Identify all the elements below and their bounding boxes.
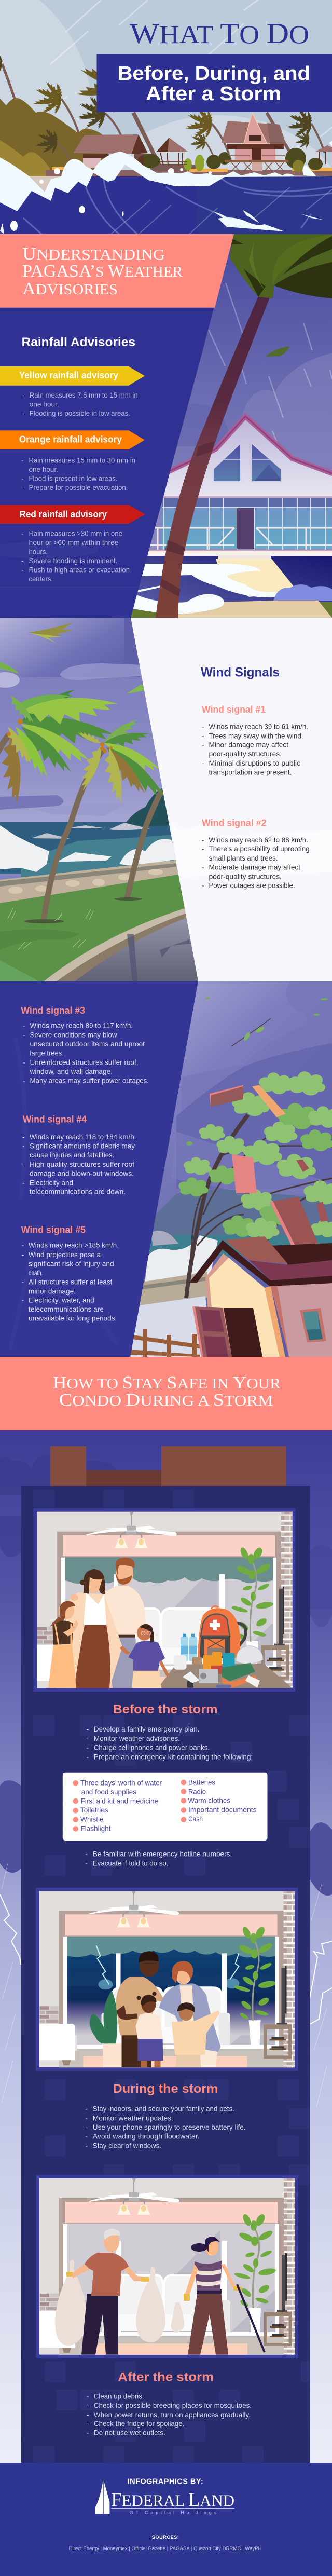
wind signal 5: - — [22, 1278, 24, 1286]
wind signal 3: Unreinforced structures suffer roof, — [30, 1059, 138, 1066]
during the storm checklist: - — [85, 2115, 88, 2122]
wind signal 3 — [21, 1005, 149, 1084]
hero illustration: storm over beach resort — [0, 0, 332, 342]
red advisory arrow: Red rainfall advisory — [20, 509, 107, 520]
wind signal 4: Significant amounts of debris may — [30, 1142, 135, 1150]
wind signal 3: Winds may reach 89 to 117 km/h. — [30, 1021, 133, 1029]
during the storm checklist: Stay clear of windows. — [93, 2142, 161, 2150]
man in cream shirt — [99, 1558, 148, 1688]
wind signal 4: Electricity and — [30, 1179, 73, 1187]
wind signal 5: - — [22, 1251, 24, 1259]
toilet paper — [174, 1655, 187, 1670]
palm trunk — [156, 287, 274, 618]
storm clouds at the top — [0, 1455, 125, 1495]
road — [67, 909, 198, 981]
red advisory text: Rush to high areas or evacuation — [29, 566, 130, 574]
section heading band: How to Stay Safe in Your Condo During a Storm: HOW TO STAY SAFE IN YOUR — [53, 1373, 281, 1393]
emergency backpack — [198, 1606, 246, 1658]
red advisory arrow — [0, 505, 145, 524]
sources — [69, 2534, 262, 2552]
shadow palm on road — [127, 934, 137, 981]
fence — [130, 1329, 200, 1357]
wind signal 4: High-quality structures suffer roof — [30, 1161, 134, 1168]
before the storm checklist: Prepare an emergency kit containing the following: — [94, 1753, 253, 1761]
wind signal 3: - — [23, 1031, 25, 1039]
emergency kit list box: Toiletries — [80, 1806, 108, 1814]
girl in purple shirt — [120, 1624, 170, 1688]
palm trees behind the resort — [0, 52, 325, 166]
emergency kit list box: Flashlight — [81, 1824, 111, 1832]
hills — [0, 98, 114, 176]
wind signal 2: - — [202, 845, 204, 853]
flying branch — [231, 1018, 271, 1046]
girl in polka dot blouse — [136, 1992, 163, 2067]
before the storm checklist: Monitor weather advisories. — [94, 1735, 180, 1742]
wind signal 3: large trees. — [30, 1050, 64, 1057]
glass ground floor — [150, 496, 332, 550]
yellow advisory arrow — [0, 366, 145, 386]
orange advisory arrow: Orange rainfall advisory — [19, 434, 122, 445]
woman in striped shirt — [184, 2237, 242, 2355]
storm tree — [186, 1115, 332, 1298]
hard hat — [236, 1646, 263, 1664]
woman in white blouse and brown skirt — [65, 1569, 122, 1688]
section heading panel: Understanding PAGASA's Weather Advisories: ADVISORIES — [22, 279, 118, 298]
wind signal 1 — [202, 704, 308, 776]
title banner: Before, During, and After a Storm: After a Storm — [146, 83, 281, 105]
before the storm checklist: Charge cell phones and power banks. — [94, 1744, 210, 1752]
wind signal 2: Moderate damage may affect — [209, 863, 300, 871]
father in tan shirt — [116, 1951, 165, 2067]
wind signal 3: window, and wall damage. — [29, 1068, 113, 1075]
older man in brown shirt — [66, 2229, 149, 2355]
flying roof planks — [210, 1085, 328, 1253]
wind signal 2: - — [202, 882, 204, 890]
red advisory text: - — [21, 530, 24, 538]
before the storm extra tips — [85, 1850, 232, 1867]
wind signal 3: Severe conditions may blow — [30, 1031, 117, 1039]
before the storm checklist: - — [86, 1735, 89, 1742]
wind signal 3: unsecured outdoor items and uproot — [30, 1040, 145, 1048]
wind signal 3: - — [23, 1076, 25, 1084]
grass — [0, 874, 195, 981]
sea — [0, 176, 332, 234]
after the storm checklist: Clean up debris. — [94, 2392, 144, 2400]
during the storm checklist: - — [85, 2123, 88, 2131]
before the storm extra tips: - — [85, 1859, 88, 1867]
yellow advisory text: - — [22, 410, 25, 417]
wind signal 2: - — [202, 836, 204, 844]
yellow advisory text: - — [22, 391, 25, 399]
sky background behind building — [0, 1430, 332, 2463]
section heading panel: Understanding PAGASA's Weather Advisories: PAGASA’S WEATHER — [22, 262, 183, 281]
during the storm checklist: - — [85, 2133, 88, 2141]
beach behind wave — [30, 176, 61, 193]
orange advisory text: one hour. — [29, 466, 58, 473]
orange advisory text — [21, 457, 135, 492]
wind signal 2: - — [202, 863, 204, 871]
potted striped plant — [90, 1991, 121, 2067]
during the storm checklist: Use your phone sparingly to preserve battery life. — [93, 2123, 246, 2131]
section heading band: How to Stay Safe in Your Condo During a Storm — [0, 1357, 332, 1430]
garbage bags — [55, 2260, 184, 2346]
wind signal 1: Wind signal #1 — [202, 704, 266, 715]
during the storm checklist: - — [85, 2142, 88, 2150]
section heading panel: Understanding PAGASA's Weather Advisories — [0, 234, 234, 308]
wind signal 4: - — [22, 1142, 25, 1150]
wind signal 1: Winds may reach 39 to 61 km/h. — [209, 723, 308, 731]
red advisory text: - — [21, 566, 24, 574]
wind signal 3: Many areas may suffer power outages. — [30, 1076, 149, 1084]
wind signal 4: Wind signal #4 — [23, 1114, 87, 1125]
before the storm checklist: Develop a family emergency plan. — [94, 1725, 199, 1733]
wind signal 5: significant risk of injury and — [29, 1260, 114, 1267]
logo: Federal Land: FEDERAL LAND — [111, 2489, 234, 2511]
logo: Federal Land: GT Capital Holdings — [130, 2510, 216, 2515]
title banner: Before, During, and After a Storm: Before, During, and — [117, 63, 310, 85]
emergency kit list box: Three days’ worth of water — [80, 1779, 162, 1787]
panel: wind signals 3 to 5 background — [0, 981, 198, 1357]
wind signal 4: - — [22, 1179, 25, 1187]
hut: gazebo — [156, 138, 188, 165]
boy in peach shirt — [171, 2002, 220, 2067]
wind signal 2: poor-quality structures. — [209, 873, 282, 880]
wind signal 4: telecommunications are down. — [30, 1188, 126, 1195]
before the storm checklist: - — [86, 1753, 89, 1761]
orange advisory text: - — [21, 457, 24, 465]
wind signal 1: Trees may sway with the wind. — [209, 732, 303, 740]
title banner: Before, During, and After a Storm — [96, 54, 332, 112]
after the storm checklist: - — [87, 2402, 89, 2409]
red advisory text: Severe flooding is imminent. — [29, 557, 117, 565]
wind signal 4: Winds may reach 118 to 184 km/h. — [30, 1133, 136, 1141]
before the storm extra tips: Evacuate if told to do so. — [93, 1859, 168, 1867]
wind signal 1: - — [202, 741, 204, 749]
wind signal 2: small plants and trees. — [209, 854, 278, 862]
side storm clouds — [0, 1780, 21, 1873]
wind signal 5: death. — [29, 1269, 43, 1277]
wind signal 2: There’s a possibility of uprooting — [209, 845, 310, 853]
tree foliage — [178, 1071, 332, 1239]
illustration: flying debris and house — [125, 981, 332, 1357]
before the storm checklist: - — [86, 1725, 89, 1733]
red advisory text: Rain measures >30 mm in one — [29, 530, 122, 538]
during the storm checklist: Monitor weather updates. — [93, 2115, 173, 2122]
wind signal 1: - — [202, 723, 204, 731]
side lightning — [0, 1894, 332, 2024]
before the storm extra tips: - — [85, 1850, 88, 1858]
sea swirl lines — [23, 178, 332, 234]
after the storm checklist: When power returns, turn on appliances gradually. — [94, 2411, 251, 2419]
palm leaves — [230, 234, 332, 298]
canned goods — [192, 1652, 234, 1674]
house upper gable — [164, 417, 332, 496]
wind signal 5 — [21, 1224, 119, 1323]
illustration: palms on windy seawall — [0, 618, 208, 981]
during the storm checklist: - — [85, 2105, 88, 2113]
wind signal 5: - — [22, 1242, 24, 1249]
yellow advisory text — [22, 391, 138, 417]
illustration: house and palm in rain — [125, 234, 332, 618]
wind signal 1: poor-quality structures. — [209, 750, 282, 758]
heading: Wind Signals: Wind Signals — [201, 665, 280, 680]
stone seawall — [0, 860, 181, 903]
grass tufts — [8, 908, 93, 950]
emergency kit list box: Cash — [188, 1815, 203, 1823]
after the storm checklist — [87, 2392, 252, 2436]
wind signal 1: transportation are present. — [209, 768, 292, 776]
palm crowns — [0, 684, 119, 805]
hut: long roof house — [73, 134, 148, 168]
wind signal 5: telecommunications are — [29, 1305, 104, 1313]
wind signal 1: Minor damage may affect — [209, 741, 288, 749]
litter picker tool — [237, 2284, 265, 2352]
wind signal 5: Winds may reach >185 km/h. — [29, 1242, 119, 1249]
foam patches on sea — [0, 210, 324, 234]
wind signal 5: Wind projectiles pose a — [29, 1251, 101, 1259]
emergency kit list box: Whistle — [80, 1816, 104, 1823]
after the storm checklist: - — [87, 2429, 89, 2436]
window scene 3: cleaning up after storm — [36, 2175, 298, 2358]
palm trunks — [44, 750, 162, 921]
before the storm checklist — [86, 1725, 253, 1761]
sources: Direct Energy | Moneymax | Official Gazette | PAGASA | Quezon City DRRMC | WayPH — [69, 2546, 262, 2552]
after the storm checklist: - — [87, 2420, 89, 2428]
building facade — [21, 1486, 310, 2463]
window scene 1: family with emergency kit — [33, 1508, 295, 1692]
wind signal 1: Minimal disruptions to public — [209, 759, 300, 767]
emergency kit list box: and food supplies — [81, 1788, 136, 1796]
orange advisory text: Rain measures 15 mm to 30 mm in — [29, 457, 135, 465]
radio and books — [182, 1663, 260, 1688]
wind signal 1: - — [202, 759, 204, 767]
white wave foam — [0, 823, 179, 872]
main stilt house — [222, 113, 288, 171]
house in storm — [189, 1236, 332, 1357]
orange advisory text: Prepare for possible evacuation. — [29, 484, 128, 492]
yellow advisory text: one hour. — [30, 400, 59, 408]
after the storm checklist: - — [87, 2411, 89, 2419]
red advisory text — [21, 530, 130, 583]
flying leaf — [28, 622, 73, 644]
wind signal 4: - — [22, 1161, 25, 1168]
kit table — [158, 1664, 293, 1688]
wind signal 2 — [202, 817, 310, 890]
emergency kit list box: First aid kit and medicine — [81, 1797, 158, 1805]
after the storm checklist: Check for possible breeding places for mosquitoes. — [94, 2402, 252, 2409]
shore and sea wall — [46, 165, 332, 178]
wind signal 1: - — [202, 732, 204, 740]
sources: SOURCES: — [152, 2534, 179, 2540]
wind signal 5: Electricity, water, and — [29, 1297, 94, 1304]
deck and water — [125, 555, 332, 618]
credit label: INFOGRAPHICS BY: — [128, 2477, 203, 2486]
distant hill and sea — [153, 1189, 332, 1235]
wind signal 2: Power outages are possible. — [209, 882, 295, 890]
white wave — [145, 1235, 218, 1282]
wind signal 3: - — [23, 1021, 25, 1029]
section heading panel: Understanding PAGASA's Weather Advisories: UNDERSTANDING — [22, 244, 165, 264]
small right hut — [315, 145, 332, 164]
during the storm checklist: Stay indoors, and secure your family and pets. — [93, 2105, 234, 2113]
yellow advisory arrow: Yellow rainfall advisory — [19, 370, 118, 380]
clouds outside window — [61, 1557, 275, 1585]
heading: Rainfall Advisories: Rainfall Advisories — [22, 335, 135, 349]
emergency kit list box: Important documents — [188, 1806, 257, 1814]
mother in grey blazer — [159, 1961, 221, 2067]
orange advisory text: - — [21, 484, 24, 492]
wind signal 4: - — [22, 1133, 25, 1141]
wind signal 3: Wind signal #3 — [21, 1005, 85, 1016]
wind signal 2: Winds may reach 62 to 88 km/h. — [209, 836, 308, 844]
girl with peach overalls — [48, 1601, 78, 1688]
after the storm checklist: Check the fridge for spoilage. — [94, 2420, 185, 2428]
red advisory text: centers. — [29, 575, 53, 583]
bushes — [137, 148, 323, 172]
section heading band: How to Stay Safe in Your Condo During a Storm: CONDO DURING A STORM — [59, 1391, 273, 1410]
yellow advisory text: Rain measures 7.5 mm to 15 mm in — [30, 391, 138, 399]
before the storm checklist: - — [86, 1744, 89, 1752]
emergency kit list box — [63, 1773, 268, 1841]
heading: Before the storm: Before the storm — [113, 1702, 218, 1716]
during the storm checklist: Avoid wading through floodwater. — [93, 2133, 199, 2141]
seawall — [140, 1272, 208, 1308]
before the storm extra tips: Be familiar with emergency hotline numbers. — [93, 1850, 232, 1858]
pale ground — [130, 1296, 212, 1357]
logo: Federal Land — [95, 2480, 234, 2515]
wind signal 5: All structures suffer at least — [29, 1278, 113, 1286]
after the storm checklist: - — [87, 2392, 89, 2400]
red advisory text: hours. — [29, 548, 48, 556]
red advisory text: - — [21, 557, 24, 565]
wind signal 5: unavailable for long periods. — [29, 1315, 117, 1323]
flying leaf — [266, 346, 290, 357]
orange advisory text: Flood is present in low areas. — [29, 475, 117, 483]
orange advisory arrow — [0, 430, 145, 449]
gable windows — [213, 443, 282, 482]
heading: During the storm: During the storm — [113, 2082, 218, 2096]
emergency kit list box: Radio — [188, 1788, 206, 1795]
orange advisory text: - — [21, 475, 24, 483]
wind signal 5: - — [22, 1297, 24, 1304]
wind signal 2: Wind signal #2 — [202, 817, 267, 828]
wind signal 3: - — [23, 1059, 25, 1066]
wind signal 5: Wind signal #5 — [21, 1224, 86, 1235]
heading: After the storm: After the storm — [118, 2370, 214, 2384]
white breaking wave — [0, 152, 332, 211]
building chimneys — [50, 1446, 286, 1486]
wind signal 4 — [22, 1114, 136, 1195]
title: What To Do: WHAT TO DO — [130, 18, 309, 50]
footer — [0, 2463, 332, 2576]
panel: wind signals — [131, 618, 332, 981]
after the storm checklist: Do not use wet outlets. — [94, 2429, 165, 2436]
sea and island — [0, 788, 175, 877]
water bottles — [181, 1634, 197, 1661]
wind signal 4: cause injuries and fatalities. — [30, 1151, 114, 1159]
red advisory text: hour or >60 mm within three — [29, 539, 118, 547]
wind signal 5: minor damage. — [29, 1287, 76, 1295]
window scene 2: family sheltering during storm — [36, 1888, 298, 2071]
yellow advisory text: Flooding is possible in low areas. — [30, 410, 130, 417]
emergency kit list box: Batteries — [188, 1778, 215, 1787]
emergency kit list box: Warm clothes — [188, 1797, 230, 1805]
panel: rainfall advisories background — [0, 234, 234, 618]
stormy view with lightning — [67, 1936, 275, 2035]
wind signal 4: damage and blown-out windows. — [30, 1170, 134, 1177]
during the storm checklist — [85, 2105, 246, 2150]
